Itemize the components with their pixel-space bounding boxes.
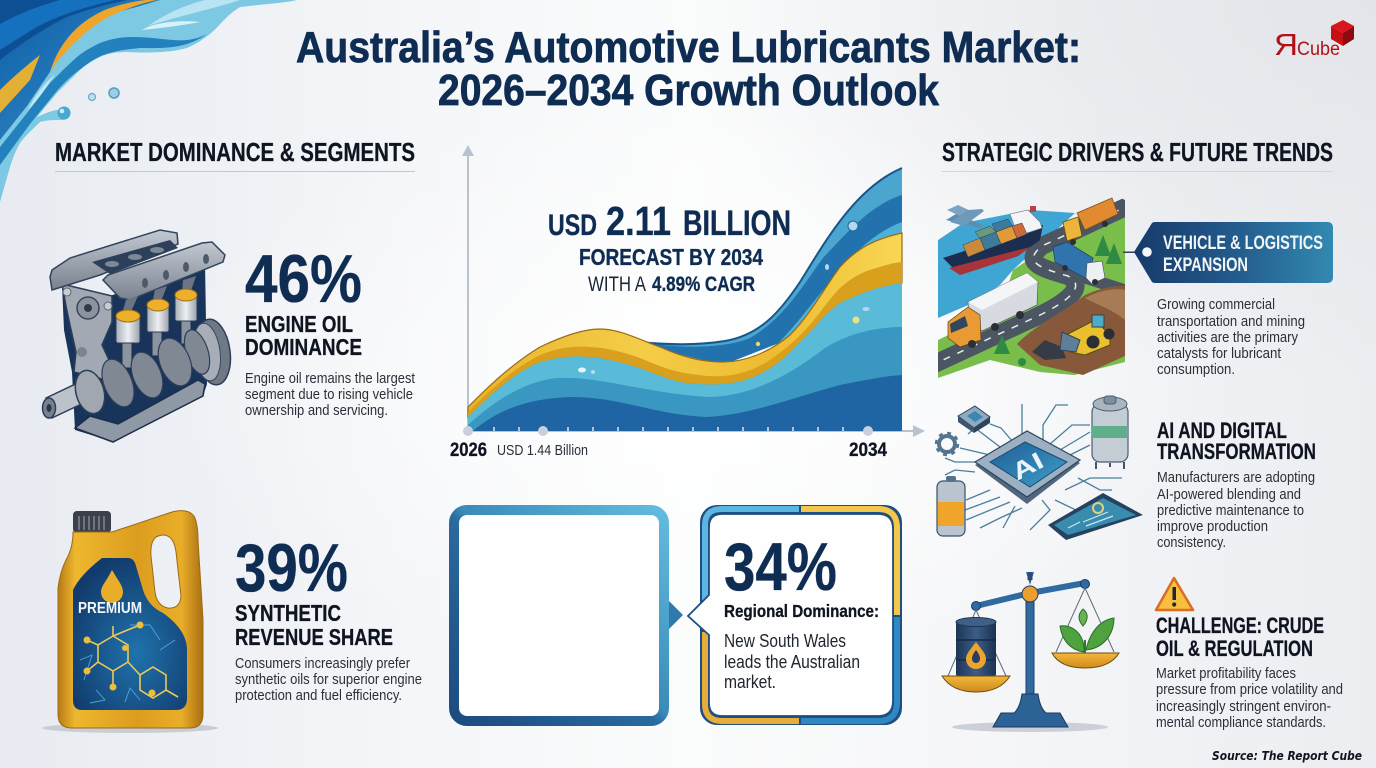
chart callout: forecast: USD	[548, 209, 597, 242]
text: challenge: mental compliance standards.	[1156, 715, 1326, 731]
stat: engine oil: Engine oil remains the largest	[245, 371, 415, 387]
text: AI and digital transformation	[1157, 418, 1316, 551]
text: logistics description: activities are the primary	[1157, 330, 1299, 346]
icon: airplane	[946, 205, 984, 228]
title: 2026–2034 Growth Outlook	[438, 66, 939, 115]
chart callout: forecast	[548, 198, 791, 296]
title: Australia’s Automotive Lubricants Market:	[296, 23, 1081, 72]
stat: engine oil: segment due to rising vehicle	[245, 387, 413, 403]
tag: vehicle and logistics: EXPANSION	[1163, 255, 1248, 276]
text: logistics description	[1157, 297, 1305, 378]
text: challenge: Market profitability faces	[1156, 666, 1296, 682]
icon: transport and logistics scene	[930, 198, 1130, 378]
icon: AI chip and circuits: AI	[1007, 447, 1048, 486]
text: AI and digital transformation: TRANSFORMATION	[1157, 439, 1316, 464]
panel: regional dominance: New South Wales	[724, 631, 846, 651]
chart axis labels: USD 1.44 Billion	[497, 442, 588, 459]
title	[296, 23, 1081, 115]
panel: regional dominance: market.	[724, 672, 776, 692]
icon: AI chip and circuits	[936, 396, 1143, 540]
chart axis labels: 2026	[450, 440, 487, 461]
chart callout: forecast: 4.89% CAGR	[652, 273, 755, 296]
panel: regional dominance: leads the Australian	[724, 652, 860, 672]
text: challenge	[1156, 613, 1343, 731]
tag: vehicle and logistics	[1123, 222, 1333, 283]
icon: balance scale with oil barrel and plant	[942, 572, 1119, 732]
stat: engine oil: 46%	[245, 241, 362, 317]
oil splash decoration	[0, 0, 297, 202]
chart axis labels	[450, 440, 887, 461]
stat: synthetic: protection and fuel efficiency.	[235, 688, 402, 704]
text: AI and digital transformation: predictive maintenance to	[1157, 503, 1304, 519]
source note: Source: The Report Cube	[1212, 749, 1362, 763]
text: AI and digital transformation: consistency.	[1157, 535, 1226, 551]
text: AI and digital transformation: AI AND DIGITAL	[1157, 418, 1287, 443]
chart callout: forecast: WITH A	[588, 273, 646, 296]
stat: synthetic: synthetic oils for superior engine	[235, 672, 422, 688]
panel: regional dominance: 34%	[724, 529, 837, 605]
text: AI and digital transformation: improve production	[1157, 519, 1268, 535]
icon: engine	[42, 230, 234, 442]
text: AI and digital transformation: AI-powered blending and	[1157, 487, 1301, 503]
chart axis labels: 2034	[849, 440, 887, 461]
logo: RCube: Cube	[1297, 38, 1340, 60]
text: challenge: pressure from price volatility and	[1156, 682, 1343, 698]
logo: RCube	[1274, 20, 1354, 62]
text: logistics description: catalysts for lubricant	[1157, 346, 1281, 362]
logo: RCube: Я	[1274, 27, 1298, 62]
stat: engine oil: ENGINE OIL	[245, 311, 353, 337]
stat: engine oil	[245, 241, 415, 419]
tag: vehicle and logistics: VEHICLE & LOGISTICS	[1163, 233, 1323, 254]
icon: synthetic oil jug: PREMIUM	[78, 600, 142, 617]
stat: synthetic: REVENUE SHARE	[235, 624, 393, 650]
stat: synthetic: 39%	[235, 530, 348, 606]
chart callout: forecast: FORECAST BY 2034	[579, 244, 763, 270]
chart callout: forecast: BILLION	[683, 204, 791, 243]
stat: engine oil: ownership and servicing.	[245, 403, 388, 419]
text: logistics description: consumption.	[1157, 362, 1235, 378]
chart callout: forecast: 2.11	[606, 198, 671, 244]
text: challenge: increasingly stringent environ-	[1156, 699, 1331, 715]
heading: market dominance: MARKET DOMINANCE & SEGMENTS	[55, 137, 415, 167]
text: logistics description: Growing commercial	[1157, 297, 1275, 313]
stat: synthetic: Consumers increasingly prefer	[235, 656, 410, 672]
text: logistics description: transportation and mining	[1157, 314, 1305, 330]
icon: warning triangle	[1156, 578, 1193, 610]
panel: regional dominance	[688, 505, 902, 725]
stat: synthetic	[235, 530, 422, 704]
text: challenge: OIL & REGULATION	[1156, 636, 1313, 661]
chart: market growth	[462, 145, 925, 437]
text: AI and digital transformation: Manufacturers are adopting	[1157, 470, 1315, 486]
panel: empty blue frame	[454, 510, 683, 721]
panel: regional dominance: Regional Dominance:	[724, 601, 879, 621]
stat: synthetic: SYNTHETIC	[235, 600, 341, 626]
stat: engine oil: DOMINANCE	[245, 334, 362, 360]
icon: synthetic oil jug	[42, 511, 218, 733]
